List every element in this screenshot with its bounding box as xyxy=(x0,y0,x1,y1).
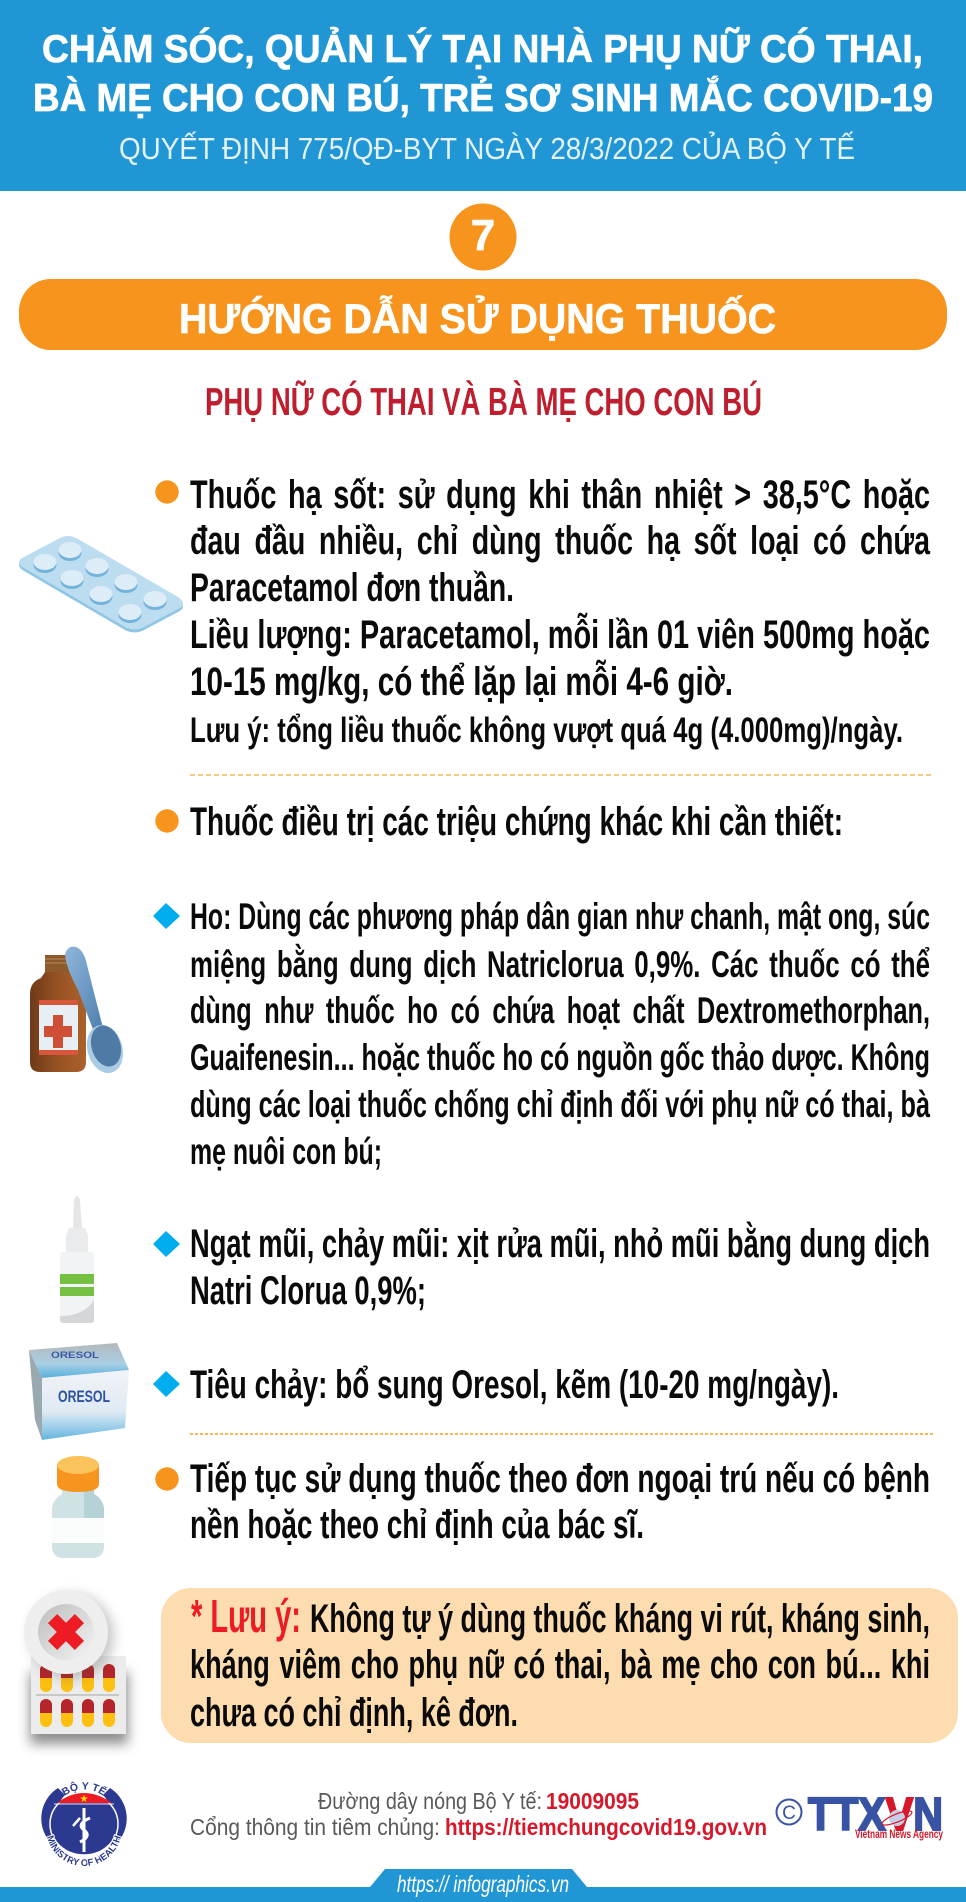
bullet: continue prescriptions: nền hoặc theo chỉ định của bác sĩ. xyxy=(190,1503,644,1547)
icon: oresol box: ORESOL xyxy=(51,1350,100,1360)
header banner xyxy=(0,0,966,191)
footer bar xyxy=(0,1869,966,1902)
subtitle: QUYẾT ĐỊNH 775/QĐ-BYT NGÀY 28/3/2022 CỦA BỘ Y TẾ xyxy=(119,130,855,166)
callout: note: chưa có chỉ định, kê đơn. xyxy=(190,1691,518,1735)
logo: ministry of health: MINISTRY OF HEALTH xyxy=(46,1834,122,1866)
bullet: fever medicine: Paracetamol đơn thuần. xyxy=(190,566,514,610)
title: CHĂM SÓC, QUẢN LÝ TẠI NHÀ PHỤ NỮ CÓ THAI, xyxy=(42,27,923,71)
title xyxy=(33,27,933,120)
icon: oresol box: ORESOL xyxy=(58,1387,110,1406)
footer contact: https://tiemchungcovid19.gov.vn xyxy=(445,1814,767,1840)
bullet: fever medicine xyxy=(155,473,931,750)
bullet: fever medicine: 10-15 mg/kg, có thể lặp lại mỗi 4-6 giờ. xyxy=(190,658,733,704)
section heading pill: HƯỚNG DẪN SỬ DỤNG THUỐC xyxy=(179,294,776,342)
bullet: continue prescriptions xyxy=(155,1457,930,1547)
logo: ministry of health: BỘ Y TẾ xyxy=(61,1782,108,1796)
footer contact: Đường dây nóng Bộ Y tế: xyxy=(318,1788,542,1814)
footer bar: https:// infographics.vn xyxy=(397,1871,569,1897)
logo: ministry of health: ★ xyxy=(80,1794,89,1805)
logo: ministry of health xyxy=(41,1782,127,1866)
bullet: stuffy nose xyxy=(153,1220,930,1313)
bullet: stuffy nose: Natri Clorua 0,9%; xyxy=(190,1269,426,1313)
icon: blister pack of tablets xyxy=(19,536,183,632)
icon: forbidden pills xyxy=(24,1590,128,1744)
icon: cough syrup bottle and spoon xyxy=(30,947,129,1077)
icon: oresol box xyxy=(29,1343,129,1440)
icon: medicine vial xyxy=(52,1456,104,1558)
bullet: cough: mẹ nuôi con bú; xyxy=(190,1131,382,1172)
title: BÀ MẸ CHO CON BÚ, TRẺ SƠ SINH MẮC COVID-19 xyxy=(33,76,933,120)
callout: note xyxy=(161,1588,958,1743)
number badge: 7 xyxy=(471,211,495,260)
footer contact xyxy=(190,1788,767,1840)
bullet: cough xyxy=(153,896,930,1172)
callout: note: * Lưu ý: xyxy=(191,1590,301,1642)
footer contact: 19009095 xyxy=(546,1788,639,1814)
logo: TTXVN: TTXVN xyxy=(808,1788,943,1840)
icon: nasal spray bottle xyxy=(60,1196,94,1323)
logo: TTXVN: C xyxy=(782,1803,796,1824)
footer contact: Cổng thông tin tiêm chủng: xyxy=(190,1814,440,1840)
number badge xyxy=(450,204,516,270)
section heading pill xyxy=(19,279,947,350)
